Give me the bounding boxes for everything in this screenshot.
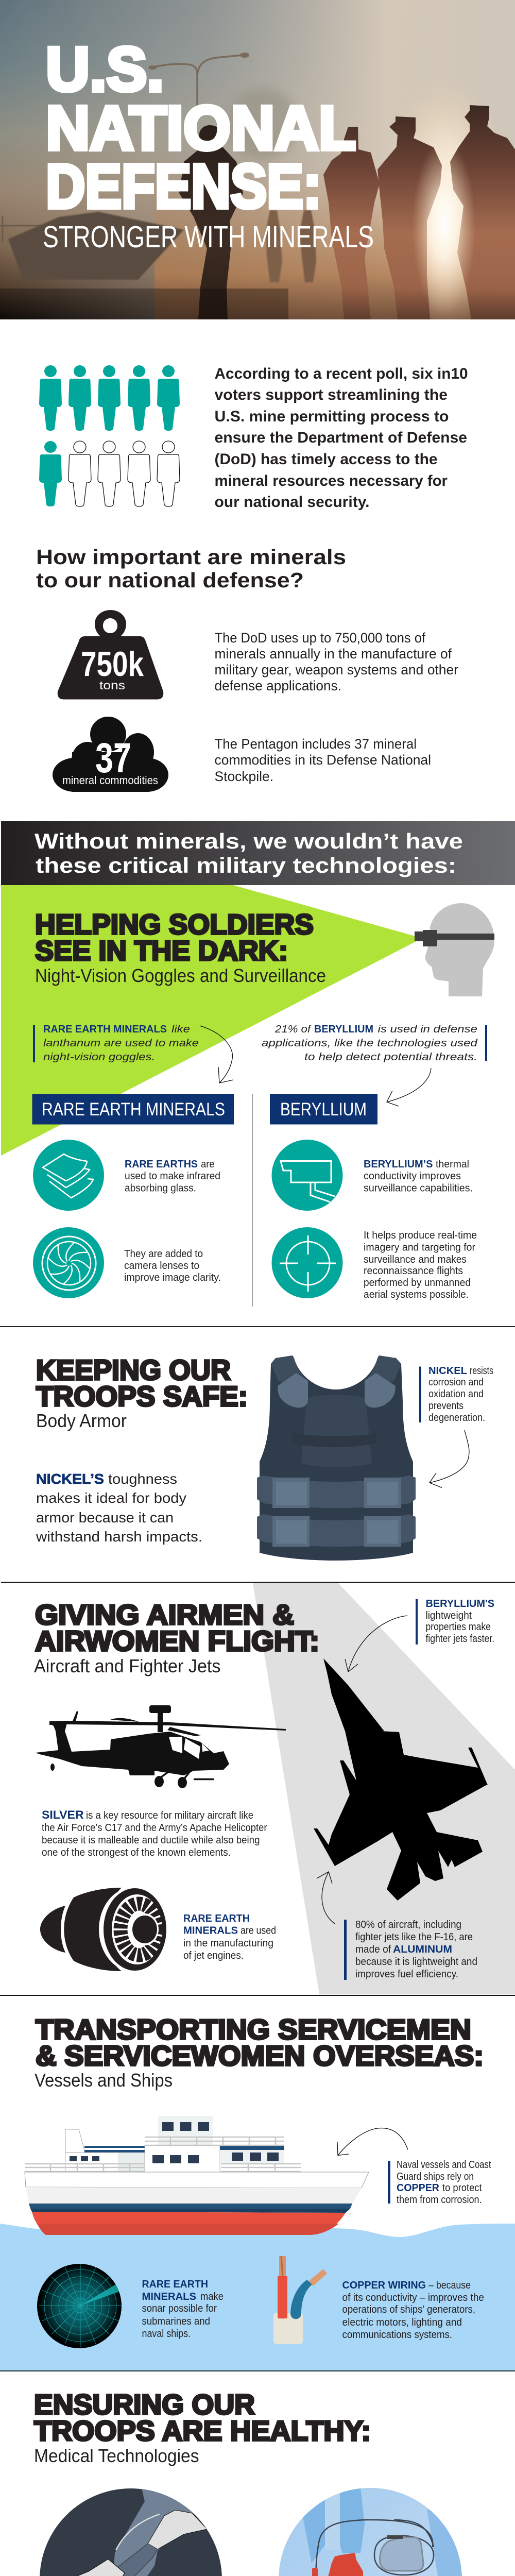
heading: AIRWOMEN FLIGHT:	[35, 1625, 319, 1657]
heading: TRANSPORTING SERVICEMEN	[36, 2013, 471, 2045]
text: silver: the Air Force’s C17 and the Army’s Apache Helicopter	[42, 1822, 267, 1834]
text: 750,000 tons: defense applications.	[214, 678, 341, 693]
callout: copper: Naval vessels and Coast	[397, 2159, 491, 2171]
text: real-time imagery: imagery and targeting for	[364, 1242, 475, 1253]
text: silver: is a key resource for military aircraft like	[86, 1810, 253, 1821]
label: beryllium: BERYLLIUM	[280, 1099, 367, 1120]
text: camera lenses: They are added to	[124, 1248, 203, 1260]
text: real-time imagery: It helps produce real-time	[364, 1230, 477, 1241]
callout: nickel: NICKEL	[428, 1365, 467, 1377]
heading: Night-Vision Goggles and Surveillance	[35, 965, 326, 986]
text: rare earth sonar: sonar possible for	[142, 2303, 217, 2314]
callout: beryllium: applications, like the technologies used	[262, 1038, 478, 1049]
text: copper wiring: of its conductivity – improves the	[342, 2292, 484, 2303]
text: real-time imagery: surveillance and makes	[364, 1254, 467, 1265]
text: beryllium thermal: thermal	[436, 1159, 469, 1170]
arrow: to ship	[337, 2128, 408, 2156]
text: 37 mineral commodities: commodities in its Defense National	[214, 752, 431, 768]
icon: crosshair	[272, 1227, 343, 1298]
text: real-time imagery	[364, 1230, 477, 1300]
icon: copper wire	[273, 2256, 327, 2344]
callout: rare earth: lanthanum are used to make	[43, 1038, 199, 1049]
heading: & SERVICEWOMEN OVERSEAS:	[36, 2040, 484, 2072]
callout: aluminum: 80% of aircraft, including	[355, 1919, 461, 1930]
hero title	[46, 35, 356, 221]
text: rare earth jet engines: in the manufacturing	[183, 1938, 273, 1949]
text: 750,000 tons: military gear, weapon systems and other	[214, 662, 458, 677]
text: silver: SILVER	[42, 1808, 84, 1821]
text: rare earth jet engines: RARE EARTH	[183, 1913, 250, 1924]
arrow: aluminum to jet	[317, 1872, 335, 1924]
callout: nickel: oxidation and	[428, 1388, 484, 1400]
poll text: our national security.	[214, 494, 370, 511]
text: 750,000 tons: The DoD uses up to 750,000 tons of	[214, 630, 425, 646]
heading	[35, 908, 326, 986]
poll text: U.S. mine permitting process to	[214, 408, 449, 425]
callout: aluminum: fighter jets like the F-16, are	[355, 1931, 473, 1943]
text: beryllium thermal	[364, 1159, 473, 1194]
heading: KEEPING OUR	[36, 1354, 231, 1386]
heading: how important: How important are minerals	[36, 545, 346, 569]
icon: infrared glass	[33, 1140, 104, 1211]
text: real-time imagery: performed by unmanned	[364, 1277, 471, 1289]
hero title: U.S.	[46, 35, 164, 104]
text: silver	[42, 1808, 267, 1858]
arrow: nickel to vest	[430, 1430, 469, 1488]
callout: beryllium: BERYLLIUM	[314, 1024, 373, 1035]
text: nickel toughness: armor because it can	[36, 1510, 174, 1526]
heading: TROOPS SAFE:	[36, 1380, 248, 1412]
heading: ENSURING OUR	[34, 2388, 255, 2420]
text: beryllium thermal: conductivity improves	[364, 1171, 461, 1182]
poll text: mineral resources necessary for	[214, 472, 448, 489]
heading: GIVING AIRMEN &	[35, 1599, 294, 1631]
callout: beryllium lightweight	[416, 1598, 494, 1645]
heading: Medical Technologies	[34, 2445, 199, 2466]
arrow: to jet	[345, 1616, 407, 1672]
callout: copper: to protect	[442, 2182, 482, 2194]
callout: beryllium lightweight: properties make	[425, 1621, 491, 1633]
text: silver: one of the strongest of the known elements.	[42, 1847, 231, 1858]
callout: nickel	[419, 1365, 493, 1423]
text: beryllium thermal: surveillance capabilities.	[364, 1183, 473, 1194]
heading: how important: to our national defense?	[36, 568, 304, 592]
panel: ships	[0, 2013, 515, 2370]
callout: rare earth: night-vision goggles.	[43, 1052, 155, 1063]
callout: aluminum: made of	[355, 1944, 391, 1955]
heading	[34, 1599, 319, 1676]
icon: head with goggles	[415, 903, 494, 996]
callout: nickel: resists	[470, 1365, 493, 1377]
text: camera lenses: improve image clarity.	[124, 1272, 221, 1283]
text: camera lenses	[124, 1248, 221, 1283]
text: nickel toughness	[36, 1471, 202, 1545]
callout: beryllium lightweight: BERYLLIUM'S	[425, 1598, 494, 1609]
text: rare earth sonar	[142, 2279, 224, 2340]
banner: without minerals	[1, 821, 515, 885]
text: rare earths glass: used to make infrared	[125, 1171, 220, 1182]
icon: ship	[25, 2116, 369, 2235]
text: 37 mineral commodities	[214, 736, 431, 784]
icon: cloud 37 mineral commodities: 37	[95, 735, 131, 782]
text: rare earth sonar: MINERALS	[142, 2291, 196, 2302]
icon: weight 750k tons: tons	[99, 679, 125, 692]
callout: aluminum: because it is lightweight and	[355, 1956, 477, 1968]
text: nickel toughness: toughness	[108, 1471, 177, 1487]
grey beam	[253, 1583, 515, 1994]
poll text: According to a recent poll, six in10	[214, 365, 468, 382]
text: nickel toughness: withstand harsh impacts.	[36, 1529, 202, 1545]
text: copper wiring: – because	[428, 2280, 471, 2291]
callout: aluminum: ALUMINUM	[393, 1944, 452, 1955]
icon: surveillance camera	[272, 1140, 343, 1211]
banner: without minerals: these critical military technologies:	[36, 853, 456, 877]
text: copper wiring	[342, 2280, 484, 2341]
icon: weight 750k tons: 750k	[81, 645, 144, 684]
text: rare earths glass	[125, 1159, 220, 1194]
water	[0, 2224, 515, 2370]
text: real-time imagery: reconnaissance flights	[364, 1265, 463, 1277]
icon: jet engine	[40, 1888, 167, 1971]
heading: Aircraft and Fighter Jets	[34, 1655, 220, 1676]
icon: camera lens	[33, 1227, 104, 1298]
label: rare earth minerals	[32, 1094, 234, 1124]
text: silver: because it is malleable and ductile while also being	[42, 1835, 260, 1846]
text: 37 mineral commodities: Stockpile.	[214, 769, 273, 784]
text: rare earth jet engines: of jet engines.	[183, 1950, 244, 1961]
callout: copper: COPPER	[397, 2182, 440, 2194]
callout: nickel: degeneration.	[428, 1412, 485, 1423]
callout: beryllium lightweight: fighter jets faster.	[425, 1633, 494, 1645]
illustration: pacemaker and heart	[279, 2488, 464, 2576]
callout: aluminum	[344, 1919, 477, 1980]
text: nickel toughness: NICKEL’S	[36, 1471, 104, 1487]
callout: aluminum: improves fuel efficiency.	[355, 1969, 458, 1980]
icon: fighter jet	[314, 1658, 488, 1901]
heading: HELPING SOLDIERS	[35, 908, 314, 940]
icon: cloud 37 mineral commodities	[53, 717, 168, 792]
callout: rare earth: like	[171, 1024, 190, 1035]
text: camera lenses: camera lenses to	[124, 1260, 199, 1272]
arrow right	[387, 1068, 431, 1106]
text: rare earth sonar: make	[200, 2291, 224, 2302]
poll text: ensure the Department of Defense	[214, 429, 467, 446]
text: rare earths glass: are	[201, 1159, 214, 1170]
callout: nickel: corrosion and	[428, 1377, 484, 1388]
text: copper wiring: electric motors, lighting and	[342, 2317, 462, 2328]
text: rare earth sonar: submarines and	[142, 2316, 210, 2327]
arrow left	[200, 1026, 233, 1083]
heading	[34, 2388, 371, 2466]
icon: apache helicopter	[36, 1705, 286, 1788]
heading	[35, 2013, 484, 2091]
hero photo: soldiers at dawn	[0, 0, 515, 335]
poll text	[214, 365, 468, 511]
icon: cloud 37 mineral commodities: mineral commodities	[62, 774, 158, 787]
heading: Body Armor	[36, 1410, 127, 1431]
illustration: prosthetic leg	[40, 2486, 222, 2576]
callout: nickel: prevents	[428, 1400, 464, 1412]
panel: aircraft	[34, 1583, 515, 1994]
callout: copper	[388, 2159, 491, 2206]
text: rare earths glass: RARE EARTHS	[125, 1159, 198, 1170]
callout: beryllium: is used in defense	[378, 1024, 477, 1035]
hero panel	[0, 0, 515, 335]
callout: beryllium lightweight: lightweight	[425, 1610, 472, 1621]
callout: beryllium: 21% of	[274, 1024, 312, 1035]
text: copper wiring: communications systems.	[342, 2329, 452, 2341]
text: 750,000 tons	[214, 630, 458, 693]
text: rare earth jet engines	[183, 1913, 276, 1961]
text: rare earth jet engines: MINERALS	[183, 1925, 238, 1936]
hero title: NATIONAL	[46, 93, 356, 163]
text: rare earths glass: absorbing glass.	[125, 1183, 196, 1194]
text: beryllium thermal: BERYLLIUM’S	[364, 1159, 433, 1170]
callout: copper: them from corrosion.	[397, 2194, 482, 2206]
green vision beam	[1, 885, 422, 1156]
text: nickel toughness: makes it ideal for body	[36, 1490, 186, 1506]
panel: medical	[34, 2388, 479, 2576]
icon: weight 750k tons	[58, 610, 163, 700]
callout: beryllium	[262, 1024, 487, 1063]
text: rare earth sonar: RARE EARTH	[142, 2279, 208, 2290]
text: rare earth jet engines: are used	[241, 1925, 276, 1936]
poll text: voters support streamlining the	[214, 386, 448, 403]
icon: radar	[37, 2264, 124, 2348]
label: beryllium	[270, 1094, 377, 1124]
text: 750,000 tons: minerals annually in the manufacture of	[214, 646, 452, 662]
heading	[36, 1354, 248, 1431]
panel: body armor	[36, 1354, 493, 1561]
icon: body armor vest	[257, 1355, 416, 1561]
hero subtitle: STRONGER WITH MINERALS	[43, 220, 374, 254]
banner: without minerals: Without minerals, we wouldn’t have	[35, 829, 463, 853]
heading: how important	[36, 545, 346, 592]
heading: SEE IN THE DARK:	[35, 935, 288, 967]
text: 37 mineral commodities: The Pentagon includes 37 mineral	[214, 736, 417, 752]
callout: rare earth	[33, 1024, 199, 1063]
panel: night vision	[1, 885, 494, 1307]
heading: Vessels and Ships	[35, 2070, 173, 2091]
label: rare earth minerals: RARE EARTH MINERALS	[42, 1099, 225, 1120]
poll text: (DoD) has timely access to the	[214, 451, 438, 468]
text: copper wiring: COPPER WIRING	[342, 2280, 426, 2291]
text: real-time imagery: aerial systems possible.	[364, 1289, 469, 1300]
text: rare earth sonar: naval ships.	[142, 2328, 191, 2340]
callout: rare earth: RARE EARTH MINERALS	[43, 1024, 167, 1035]
callout: copper: Guard ships rely on	[397, 2171, 474, 2182]
callout: beryllium: to help detect potential threats.	[304, 1052, 477, 1063]
hero title: DEFENSE:	[46, 151, 321, 221]
pictogram: six in ten voters	[39, 365, 180, 506]
text: copper wiring: operations of ships’ generators,	[342, 2304, 475, 2315]
heading: TROOPS ARE HEALTHY:	[34, 2415, 371, 2447]
